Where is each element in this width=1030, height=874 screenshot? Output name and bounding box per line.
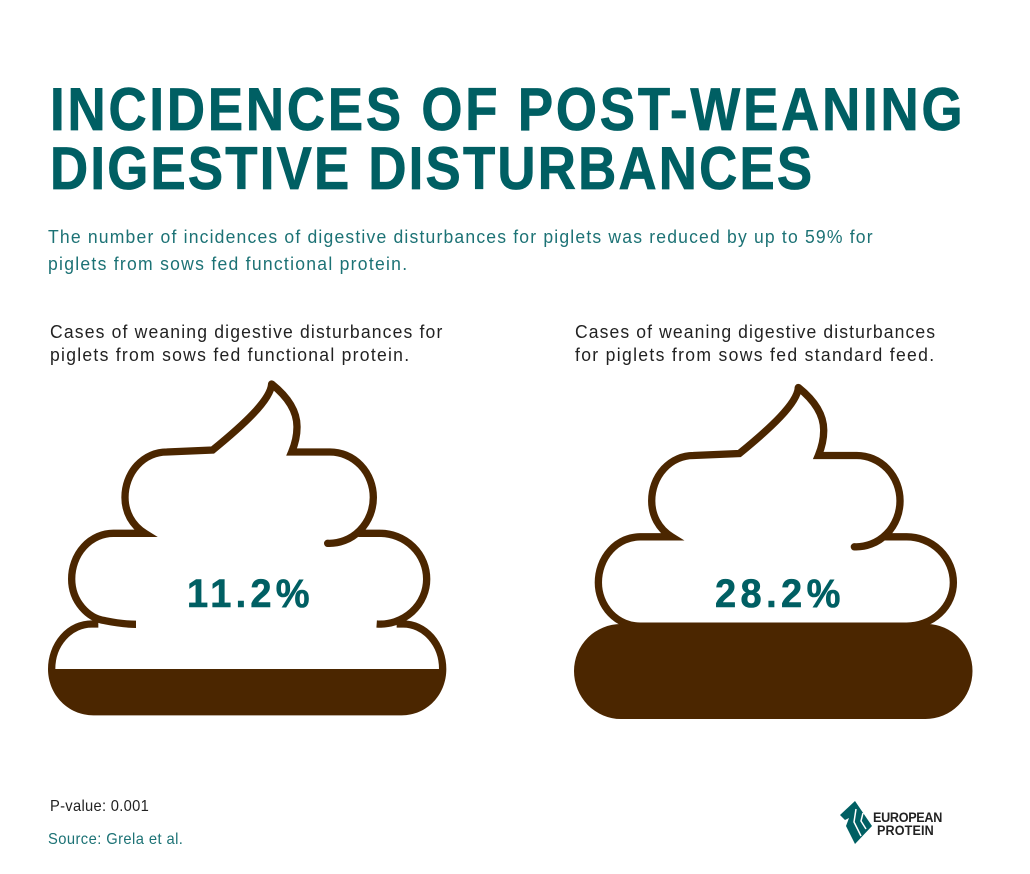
- right chart heading: for piglets from sows fed standard feed.: [575, 345, 934, 365]
- title: INCIDENCES OF POST-WEANING: [50, 76, 963, 143]
- left chart heading: [50, 322, 442, 365]
- logo wordmark: PROTEIN: [877, 822, 934, 838]
- right value: 28.2%: [715, 572, 840, 616]
- logo: European Protein: [840, 801, 942, 844]
- left fill level: [48, 669, 446, 715]
- right chart heading: Cases of weaning digestive disturbances: [575, 322, 935, 342]
- icon: right poop outline: [598, 387, 953, 626]
- logo wordmark: [873, 809, 942, 838]
- right chart heading: [575, 322, 935, 365]
- p-value note: P-value: 0.001: [50, 798, 149, 815]
- subtitle text: piglets from sows fed functional protein.: [48, 254, 407, 274]
- left poop chart: functional protein: [48, 384, 446, 715]
- icon: left poop outline: [52, 384, 443, 669]
- title: DIGESTIVE DISTURBANCES: [50, 135, 812, 202]
- icon: logo mark: [840, 801, 872, 844]
- subtitle text: [48, 227, 873, 274]
- right poop chart: standard feed: [574, 387, 973, 719]
- source note: Source: Grela et al.: [48, 831, 183, 848]
- left chart heading: Cases of weaning digestive disturbances for: [50, 322, 442, 342]
- left value: 11.2%: [187, 572, 310, 616]
- logo wordmark: EUROPEAN: [873, 809, 942, 825]
- left chart heading: piglets from sows fed functional protein.: [50, 345, 409, 365]
- right fill level: [574, 622, 973, 719]
- subtitle text: The number of incidences of digestive disturbances for piglets was reduced by up to 59% for: [48, 227, 873, 247]
- title: [50, 76, 963, 202]
